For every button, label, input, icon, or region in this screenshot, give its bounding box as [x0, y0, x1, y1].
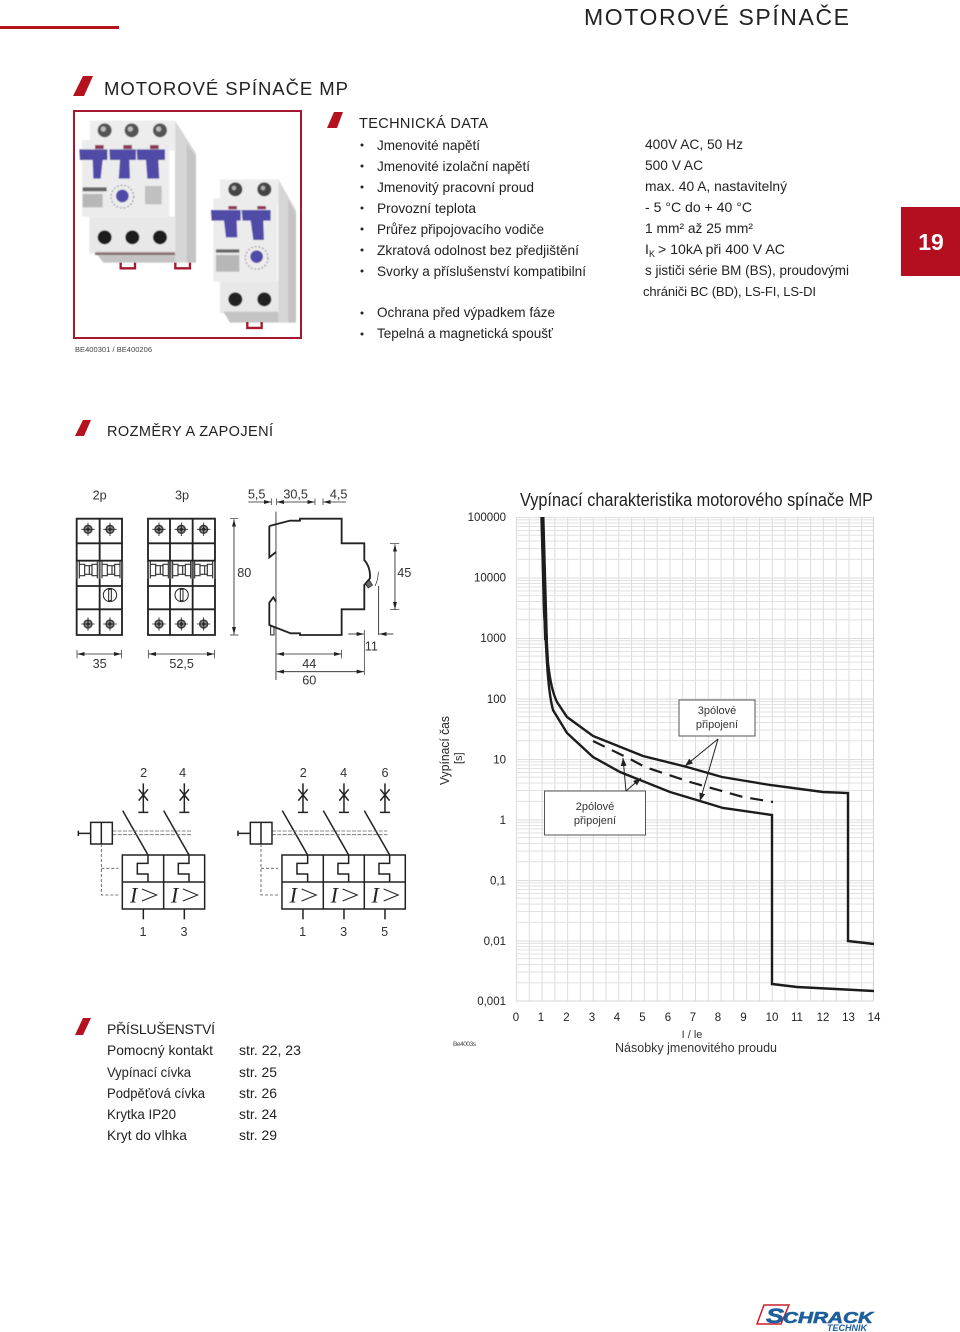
curve: dashed middle — [593, 741, 773, 802]
page title: MOTOROVÉ SPÍNAČE — [584, 3, 849, 30]
list: technical values: s jističi série BM (BS), proudovými — [645, 262, 849, 278]
wiring: 3-pole: 5 — [381, 925, 388, 939]
x axis labels: 11 — [791, 1012, 803, 1024]
wiring: 2-pole: 3 — [180, 925, 188, 939]
x axis labels: 8 — [715, 1012, 721, 1024]
dimension drawing — [77, 487, 411, 688]
list: accessories — [107, 1042, 301, 1143]
y axis labels: 10000 — [474, 572, 506, 584]
dimension: height 80 — [230, 519, 251, 635]
callout: 3-pole connection: 3pólové — [698, 705, 736, 717]
curve: lower 2-pole limit — [542, 517, 874, 991]
dimension: height 80: 80 — [237, 566, 251, 580]
heading: Příslušenství: PŘÍSLUŠENSTVÍ — [107, 1021, 215, 1037]
chart title: Vypínací charakteristika motorového spínače MP — [520, 490, 873, 510]
list: technical parameters: Průřez připojovacího vodiče — [377, 221, 544, 237]
side view: 45 — [397, 566, 411, 580]
x axis labels: 14 — [868, 1012, 881, 1024]
x axis labels: 4 — [614, 1012, 621, 1024]
list: accessories: str. 26 — [239, 1085, 277, 1101]
x axis labels: 2 — [563, 1012, 570, 1024]
arrows: 2-pole callout — [623, 758, 641, 791]
list: technical parameters: Jmenovitý pracovní proud — [377, 179, 534, 195]
photo caption: BE400301 / BE400206 — [75, 345, 152, 354]
y axis labels: 0,1 — [490, 876, 506, 888]
section tab: 19: 19 — [918, 229, 944, 255]
y axis labels: 10 — [493, 754, 506, 766]
list: technical parameters: Tepelná a magnetická spoušť — [377, 325, 554, 341]
list: technical parameters: Jmenovité napětí — [377, 137, 480, 153]
wiring diagrams — [78, 766, 405, 939]
callout: 3-pole connection: připojení — [696, 719, 738, 731]
wiring: 3-pole: 6 — [381, 766, 388, 780]
heading: Rozměry a zapojení — [75, 420, 273, 440]
y axis labels: 100000 — [468, 512, 506, 524]
side view: 30,5 — [283, 487, 308, 501]
logo: Schrack Technik: CHRACK — [783, 1310, 875, 1327]
icon: three-pole breaker — [79, 121, 196, 268]
list: technical values: K — [649, 249, 655, 259]
list: accessories: str. 22, 23 — [239, 1042, 301, 1058]
x axis labels: 6 — [665, 1012, 671, 1024]
x axis title: I / le — [682, 1029, 702, 1041]
header rule — [0, 26, 119, 29]
logo: Schrack Technik — [757, 1305, 875, 1332]
x axis labels: 5 — [639, 1012, 646, 1024]
wiring: 2-pole: 2 — [140, 766, 147, 780]
list: technical values: - 5 °C do + 40 °C — [645, 199, 752, 215]
front view: 2p: 35 — [93, 657, 107, 671]
y axis labels: 0,001 — [477, 996, 506, 1008]
list: technical parameters: Zkratová odolnost bez předjištění — [377, 242, 579, 258]
list: accessories: Kryt do vlhka — [107, 1127, 187, 1143]
list: accessories: Krytka IP20 — [107, 1106, 176, 1122]
chart: trip characteristic — [437, 490, 881, 1055]
front view: 3p: 3p — [175, 488, 189, 502]
list: technical parameters: Provozní teplota — [377, 200, 476, 216]
thick initial curve segment — [542, 517, 546, 640]
wiring: 3-pole — [238, 766, 405, 939]
wiring: 3-pole: 4 — [340, 766, 347, 780]
wiring: 3-pole: 1 — [299, 925, 306, 939]
x axis labels: 3 — [589, 1012, 595, 1024]
y axis labels: 100 — [487, 694, 506, 706]
list: technical values: I — [645, 241, 649, 257]
wiring: 3-pole: 2 — [300, 766, 307, 780]
chart grid — [516, 517, 874, 1001]
front view: 3p: 52,5 — [169, 657, 194, 671]
x axis title: Násobky jmenovitého proudu — [615, 1040, 777, 1055]
list: accessories: str. 29 — [239, 1127, 277, 1143]
wiring: 2-pole — [78, 766, 205, 939]
front view: 2p: 2p — [93, 488, 107, 502]
side view: 5,5 — [248, 487, 265, 501]
wiring: 2-pole: 4 — [179, 766, 186, 780]
y axis title: Vypínací čas — [437, 716, 452, 785]
heading: Technická data: TECHNICKÁ DATA — [359, 115, 488, 132]
callout: 2-pole connection: připojení — [574, 815, 616, 827]
list: technical parameters: Jmenovité izolační napětí — [377, 158, 530, 174]
panel: product photo — [74, 111, 301, 338]
side view: 4,5 — [330, 487, 347, 501]
x axis title — [615, 1029, 777, 1055]
list: technical values: max. 40 A, nastavitelný — [645, 178, 787, 194]
x axis labels: 9 — [740, 1012, 747, 1024]
side view: 60 — [302, 674, 316, 688]
callout: 2-pole connection — [544, 791, 646, 835]
y axis title — [437, 716, 465, 785]
heading: Příslušenství — [75, 1018, 215, 1037]
heading: Technická data — [327, 112, 488, 132]
curve: upper 3-pole limit — [542, 517, 874, 944]
front view: 2p — [77, 488, 122, 671]
x axis labels: 1 — [538, 1012, 544, 1024]
x axis labels — [513, 1012, 881, 1024]
list: accessories: str. 25 — [239, 1064, 277, 1080]
list: accessories: str. 24 — [239, 1106, 277, 1122]
x axis labels: 7 — [690, 1012, 696, 1024]
list: technical parameters — [360, 137, 586, 341]
section tab: 19 — [901, 207, 960, 276]
heading: Rozměry a zapojení: ROZMĚRY A ZAPOJENÍ — [107, 423, 273, 440]
drawing reference code: Be4003s — [453, 1041, 477, 1048]
list: technical values: 400V AC, 50 Hz — [645, 136, 743, 152]
callout: 3-pole connection — [679, 700, 755, 736]
x axis labels: 10 — [766, 1012, 778, 1024]
side view: 11 — [365, 640, 378, 654]
logo: Schrack Technik: S — [766, 1305, 784, 1328]
side view — [248, 487, 411, 688]
list: technical values: > 10kA při 400 V AC — [658, 241, 785, 257]
icon: two-pole breaker — [211, 179, 296, 328]
side view: 44 — [302, 657, 316, 671]
heading: Motorové spínače MP: MOTOROVÉ SPÍNAČE MP — [104, 78, 348, 99]
callout: 2-pole connection: 2pólové — [576, 801, 614, 813]
list: technical values: 1 mm² až 25 mm² — [645, 220, 753, 236]
arrows: 3-pole callout — [685, 739, 718, 801]
x axis labels: 13 — [842, 1012, 855, 1024]
x axis labels: 12 — [817, 1012, 829, 1024]
list: accessories: Vypínací cívka — [107, 1064, 191, 1080]
y axis labels: 0,01 — [484, 936, 506, 948]
y axis labels: 1 — [500, 815, 506, 827]
list: accessories: Pomocný kontakt — [107, 1042, 213, 1058]
y axis labels: 1000 — [480, 633, 506, 645]
y axis title: [s] — [453, 752, 465, 764]
wiring: 2-pole: 1 — [139, 925, 147, 939]
list: technical parameters: Ochrana před výpadkem fáze — [377, 304, 555, 320]
list: technical values: chrániči BC (BD), LS-FI, LS-DI — [643, 284, 816, 299]
list: technical parameters: Svorky a příslušenství kompatibilní — [377, 263, 586, 279]
wiring: 3-pole: 3 — [340, 925, 347, 939]
list: accessories: Podpěťová cívka — [107, 1085, 205, 1101]
y axis labels — [468, 512, 506, 1008]
list: technical values — [643, 136, 849, 299]
x axis labels: 0 — [513, 1012, 519, 1024]
list: technical values: 500 V AC — [645, 157, 703, 173]
front view: 3p — [148, 488, 215, 671]
